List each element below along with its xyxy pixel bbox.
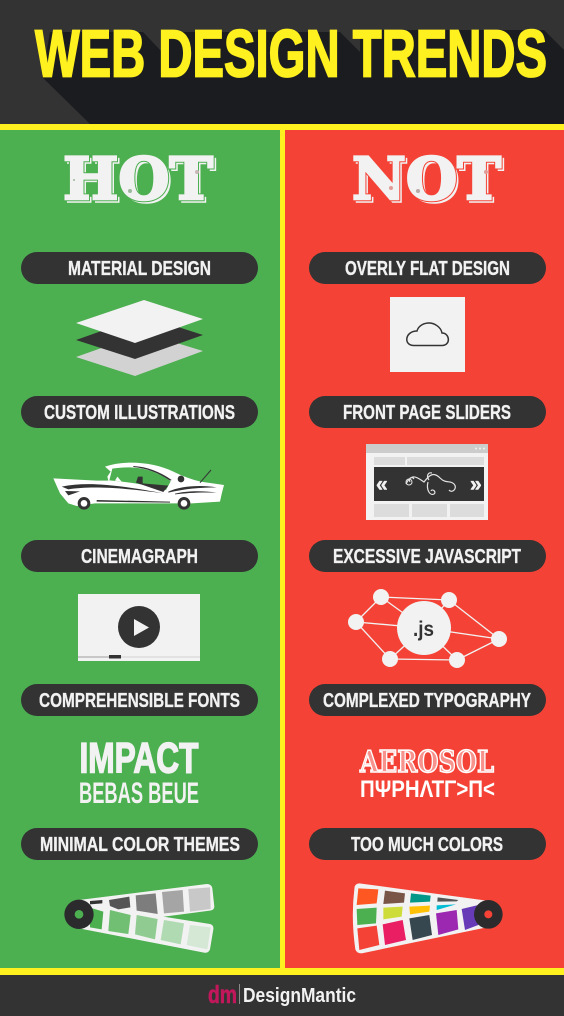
heading: HOT: HOT [66,148,216,216]
label: excessive javascript [309,540,546,572]
icon: website slider mockup: « [376,473,388,496]
icon: classic car [53,463,224,510]
heading: NOT: NOT [354,148,504,216]
label: overly flat design: OVERLY FLAT DESIGN [345,257,510,280]
sample fonts: decorative and runic: AEROSOL [359,745,494,780]
heading: HOT: HOT [63,145,213,213]
panel: not background [285,130,564,968]
label: overly flat design [309,252,546,284]
footer logo: DesignMantic [243,985,356,1007]
label: front page sliders: FRONT PAGE SLIDERS [343,401,511,424]
label: complexed typography [309,684,546,716]
label: too much colors: TOO MUCH COLORS [351,833,503,856]
icon: flat cloud card [390,297,465,372]
icon: video player [78,594,200,661]
footer logo [208,981,356,1009]
sample fonts: impact and bebas [79,734,199,810]
label: custom illustrations: CUSTOM ILLUSTRATIONS [44,401,235,424]
label: cinemagraph [21,540,258,572]
icon: stacked material layers [76,300,203,376]
sample fonts: impact and bebas: BEBAS BEUE [79,777,199,810]
label: material design: MATERIAL DESIGN [68,257,211,280]
label: too much colors [309,828,546,860]
panel: hot background [0,130,280,968]
icon: website slider mockup: » [470,473,482,496]
label: minimal color themes [21,828,258,860]
heading: HOT: HOT [63,145,213,213]
label: comprehensible fonts [21,684,258,716]
icon: multicolor swatch fan [353,883,503,953]
icon: javascript network: .js [413,618,434,641]
header band [0,0,564,124]
label: custom illustrations [21,396,258,428]
icon: javascript network [348,589,507,668]
sample fonts: decorative and runic [359,745,495,803]
label: cinemagraph: CINEMAGRAPH [81,545,198,568]
heading: NOT: NOT [352,145,501,213]
label: front page sliders [309,396,546,428]
icon: monochrome swatch fan [64,884,214,953]
label: minimal color themes: MINIMAL COLOR THEMES [40,833,240,856]
icon: website slider mockup [366,444,488,520]
label: comprehensible fonts: COMPREHENSIBLE FONTS [39,689,240,712]
label: material design [21,252,258,284]
heading: NOT: NOT [352,145,501,213]
footer band [0,975,564,1016]
sample fonts: decorative and runic: ПΨΡΗΛΤΓ>Π< [360,776,495,803]
footer logo: dm [208,981,237,1009]
sample fonts: impact and bebas: IMPACT [80,734,198,782]
